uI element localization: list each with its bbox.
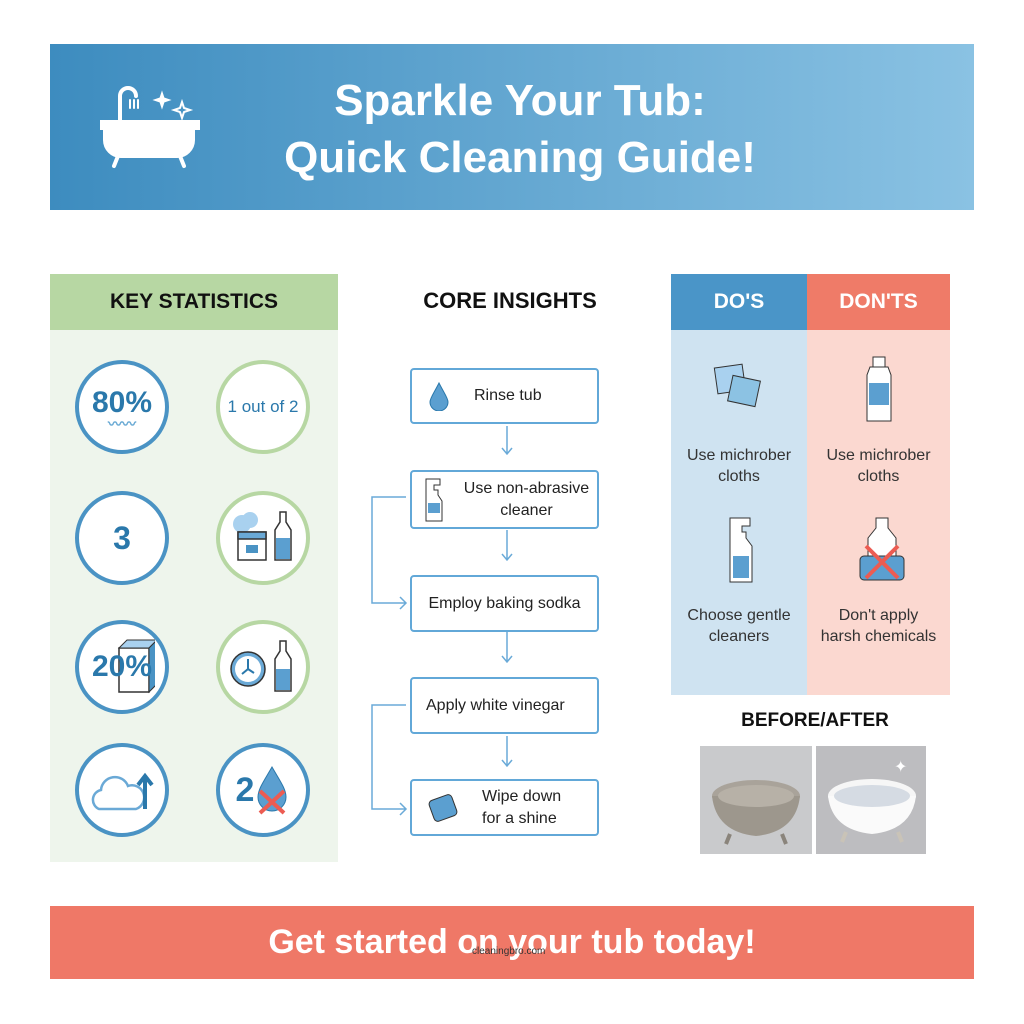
panel: do's [671, 274, 807, 695]
footer banner: Get started on your tub today! [268, 923, 756, 961]
dont: microfiber text [826, 447, 931, 485]
panel: key statistics [50, 274, 338, 862]
do: microfiber text: Use michrober [687, 447, 791, 464]
title [284, 76, 756, 182]
heading: don'ts: DON'TS [839, 290, 918, 313]
stat: 3 [75, 491, 169, 585]
step: non-abrasive cleaner [410, 470, 599, 529]
stat: clock and bottle [216, 620, 310, 714]
step: wipe down [410, 779, 599, 836]
image: before tub [700, 746, 812, 854]
heading: do's: DO'S [714, 290, 764, 313]
stat: baking soda and vinegar icon [216, 491, 310, 585]
stat: cloud up [75, 743, 169, 837]
stat: 20% [75, 620, 169, 714]
do: microfiber text: cloths [718, 468, 760, 485]
image: after tub: ✦ [894, 759, 907, 776]
step: non-abrasive cleaner: Use non-abrasive cleaner [464, 480, 589, 518]
icon: spray bottle [730, 518, 752, 582]
step: white vinegar: Apply white vinegar [426, 696, 565, 714]
stat: 1 out of 2 [216, 360, 310, 454]
header banner [50, 44, 974, 210]
step: rinse tub: Rinse tub [474, 387, 542, 404]
stat: 80% [75, 360, 169, 454]
heading: before/after: BEFORE/AFTER [741, 710, 889, 731]
icon: microfiber cloth [714, 364, 761, 408]
dont: harsh chemicals [821, 607, 936, 645]
image: after tub [816, 746, 926, 854]
heading: key statistics: KEY STATISTICS [110, 290, 278, 313]
do: microfiber text [687, 447, 791, 485]
heading: core insights: CORE INSIGHTS [423, 288, 597, 313]
heading: don'ts [807, 274, 950, 330]
heading: key statistics [50, 274, 338, 330]
icon: bathtub [100, 86, 200, 168]
dont: harsh chemicals: harsh chemicals [821, 628, 936, 645]
step: wipe down: Wipe down [482, 788, 561, 804]
dont: microfiber text: cloths [858, 468, 899, 485]
stat: 80%: 〰〰 [108, 416, 136, 432]
flow connectors [371, 426, 512, 816]
do: gentle cleaners [687, 607, 791, 645]
heading: do's [671, 274, 807, 330]
do: gentle cleaners: Choose gentle [687, 607, 791, 624]
stat: 2 drops: 2 [236, 770, 254, 808]
title: Quick Cleaning Guide! [284, 133, 756, 182]
step: wipe down: for a shine [482, 810, 557, 826]
stat: 3: 3 [113, 520, 131, 556]
step: white vinegar [410, 677, 599, 734]
dont: harsh chemicals: Don't apply [839, 607, 918, 624]
stat: 1 out of 2: 1 out of 2 [228, 397, 298, 416]
do: gentle cleaners: cleaners [709, 628, 769, 645]
icon: harsh chemical crossed [860, 518, 904, 580]
dont: microfiber text: Use michrober [826, 447, 931, 464]
step: rinse tub [410, 368, 599, 424]
footer banner [50, 906, 974, 979]
icon: bottle [866, 356, 892, 422]
stat: 20%: 20% [92, 650, 152, 683]
step: baking soda: Employ baking sodka [428, 594, 581, 612]
stat: 80%: 80% [92, 386, 152, 419]
title: Sparkle Your Tub: [334, 76, 706, 125]
step: baking soda [410, 575, 599, 632]
stat: 2 drops [216, 743, 310, 837]
watermark: cleaningbro.com [472, 946, 545, 957]
panel: don'ts [807, 274, 950, 695]
